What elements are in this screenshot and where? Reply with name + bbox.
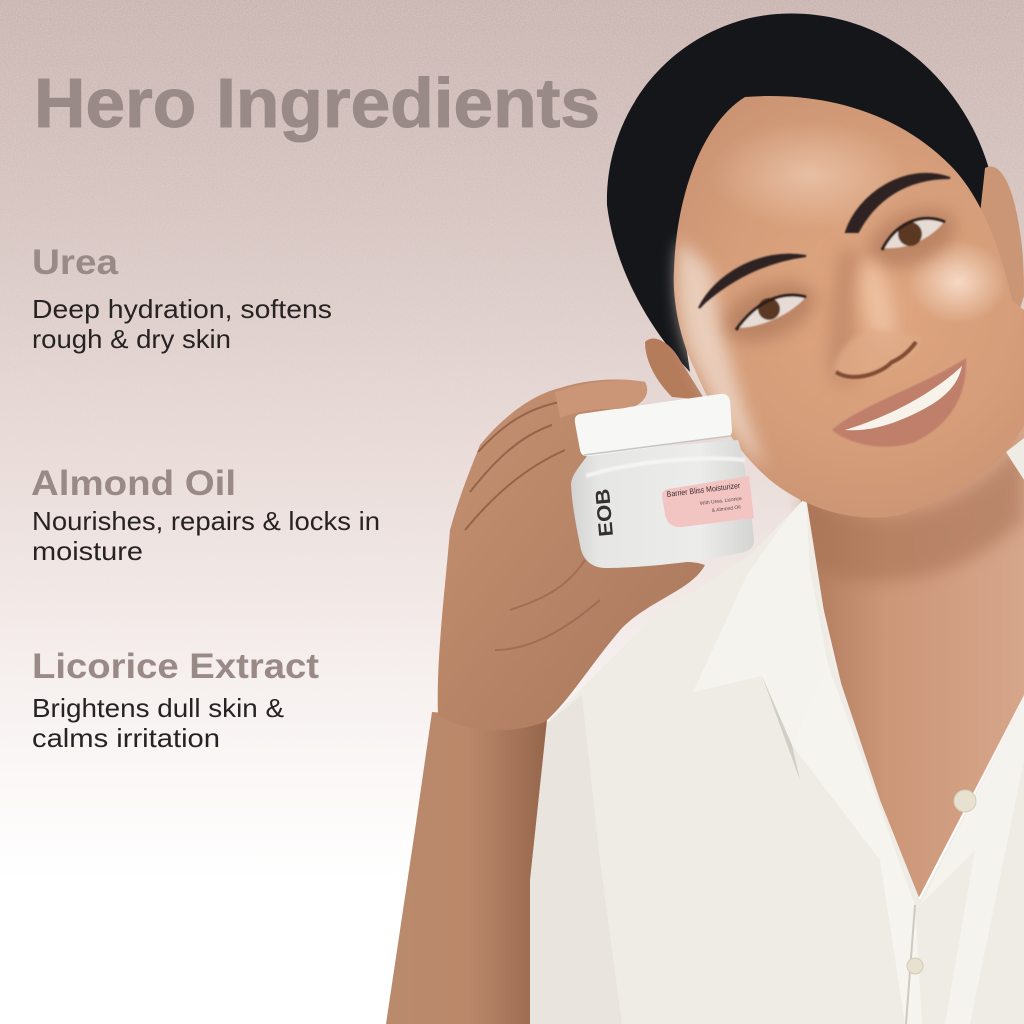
jar: With Urea, Licorice [700,496,742,507]
face [674,96,1024,518]
jar [571,394,754,568]
collar right [920,700,1024,1024]
placket [792,665,922,1024]
eyebrow right [846,174,950,232]
jar body [571,440,754,568]
ingredient: almond oil: Almond Oil [31,464,236,503]
ingredient: licorice extract: Licorice Extract [32,647,319,686]
ingredient list [31,243,380,753]
pale side of face [677,240,765,470]
ingredient: almond oil: moisture [32,536,143,566]
shirt [530,438,1024,1024]
ingredient: licorice extract: Brightens dull skin & [32,693,284,723]
collar left [693,497,828,745]
lips [832,358,966,447]
hand [438,380,705,730]
eye socket shadow right [860,197,964,279]
ingredient: licorice extract [32,647,319,753]
brand text: EOB [592,488,618,537]
ingredient: licorice extract: calms irritation [32,723,220,753]
nose highlight [855,258,901,352]
arm [386,712,547,1024]
forehead highlight [710,120,910,230]
cheek highlight [908,240,1008,324]
jar label [662,476,754,527]
ingredient: almond oil: Nourishes, repairs & locks in [32,506,380,536]
eyebrow left [699,255,806,308]
ingredient: urea: Deep hydration, softens [32,294,332,324]
label text: Barrier Bliss Moisturizer [666,481,741,499]
eye socket shadow left [716,270,824,354]
model photo illustration [386,14,1024,1024]
ingredient: almond oil [31,464,380,566]
title: Hero Ingredients [34,64,600,142]
ingredient: urea: Urea [32,243,119,282]
hair [607,14,998,372]
nose tip [834,330,921,378]
shirt buttons [954,790,976,812]
chin shadow [800,440,1024,582]
eye left [736,295,806,330]
jar: & Almond Oil [712,505,741,514]
finger lines [465,402,565,530]
ear left [645,338,705,400]
fingertips on lid [555,380,647,418]
neck and chest [795,420,1024,905]
jar shoulder highlight [586,458,745,476]
palm creases [495,560,600,650]
jar lid [575,394,732,456]
ingredient: urea [32,243,332,354]
ingredient: urea: rough & dry skin [32,324,231,354]
nose shadow [828,250,862,385]
eye right [882,218,945,250]
ear right [975,167,1024,340]
teeth [845,366,962,430]
